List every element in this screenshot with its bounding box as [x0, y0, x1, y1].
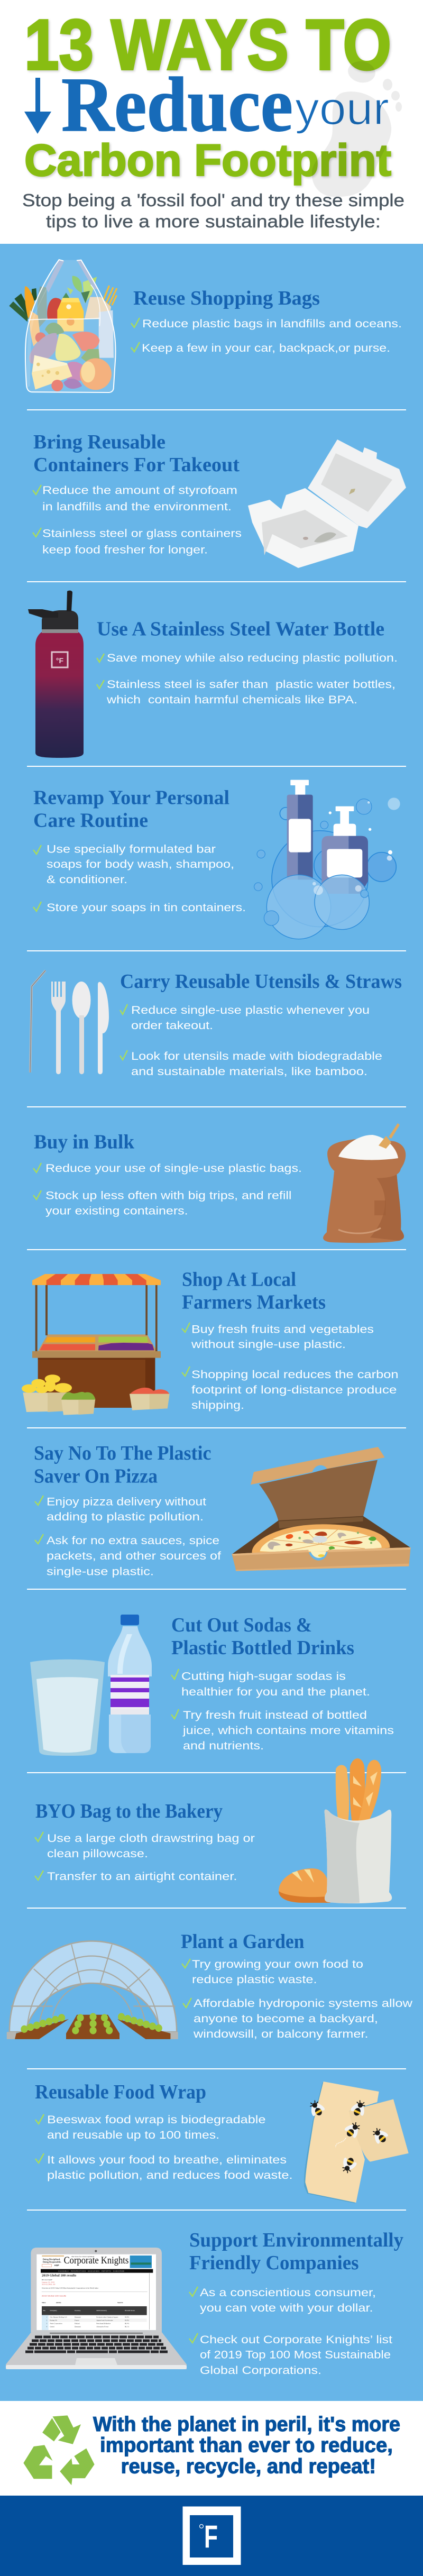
- heading: [171, 1614, 354, 1659]
- table rows: Denmark: [75, 2316, 81, 2318]
- panel: cut out sodas and plastic bottled drinks: [30, 1614, 394, 1756]
- table header text: Country: [75, 2309, 81, 2312]
- table rows: [47, 2316, 129, 2328]
- tip: bar soaps: [33, 842, 234, 886]
- tip: safer than plastic: [97, 678, 396, 706]
- closing message: [93, 2413, 400, 2478]
- tip: hydroponic systems: Affordable hydroponic systems allow: [194, 1997, 413, 2010]
- tip: styrofoam: [33, 484, 237, 513]
- tip: high-sugar sodas: Cutting high-sugar sodas is: [181, 1670, 346, 1683]
- tip: safer than plastic: Stainless steel is safer than plastic water bottles,: [107, 678, 396, 691]
- heading: Support Environmentally: [189, 2229, 403, 2251]
- tip: airtight container: Transfer to an airtight container.: [47, 1870, 237, 1883]
- tip: reduce single-use: Reduce single-use plastic whenever you: [131, 1004, 370, 1016]
- screen text: Corporate Knights: [64, 2255, 128, 2266]
- tip: fresh fruits: Buy fresh fruits and vegetables: [191, 1323, 374, 1335]
- tip: beeswax wrap: and reusable up to 100 times.: [47, 2129, 219, 2141]
- panel: reusable containers for takeout: [33, 431, 406, 568]
- title word: Reduce: Reduce: [61, 61, 293, 148]
- closing message: With the planet in peril, it's more: [93, 2413, 400, 2436]
- bottle logo: °F: [56, 656, 64, 665]
- panel: buy in bulk: [33, 1123, 406, 1243]
- panel: reusable food wrap: [35, 2081, 409, 2203]
- tip: food breathe: [35, 2153, 293, 2181]
- table rows: Products-other Chemical Agents: [96, 2316, 118, 2318]
- screen text: Show: [42, 2302, 46, 2304]
- heading: Buy in Bulk: [34, 1131, 135, 1153]
- panel: environmentally friendly companies: [6, 2229, 403, 2377]
- tip: big trips: [33, 1189, 292, 1217]
- tip: pizza delivery: adding to plastic pollution.: [47, 1510, 204, 1523]
- heading: [182, 1268, 326, 1314]
- panel: reuse shopping bags: [9, 260, 402, 392]
- table rows: Finland: [75, 2323, 80, 2325]
- tip: pizza delivery: Enjoy pizza delivery without: [47, 1496, 206, 1508]
- tip: stainless containers: Stainless steel or glass containers: [42, 527, 242, 539]
- tip: cloth bag: [35, 1832, 255, 1860]
- tip: styrofoam: Reduce the amount of styrofoam: [42, 484, 237, 497]
- tip: reduce single-use: [120, 1004, 370, 1032]
- heading: Shop At Local: [182, 1268, 296, 1290]
- table rows: Orsted: [50, 2326, 54, 2328]
- tip: Corporate Knights list: of 2019 Top 100 Most Sustainable: [200, 2348, 391, 2361]
- table rows: Kering SA: [50, 2319, 58, 2321]
- closing message: reuse, recycle, and repeat!: [121, 2455, 376, 2478]
- icon: plastic bag of groceries: [9, 260, 117, 392]
- tip: shopping local: Shopping local reduces the carbon: [191, 1368, 399, 1381]
- panel: stainless steel water bottle: [28, 591, 398, 758]
- icon: grey footprint watermark: [312, 59, 402, 197]
- table rows: 1: [47, 2316, 48, 2318]
- tip: vote with your dollar: you can vote with your dollar.: [200, 2302, 373, 2314]
- tip: fresh fruits: [182, 1323, 374, 1351]
- heading: Saver On Pizza: [34, 1465, 158, 1487]
- table rows: 2: [47, 2319, 48, 2321]
- table rows: France: [75, 2319, 79, 2321]
- tip: fresh fruit: juice, which contains more vitamins: [182, 1724, 394, 1737]
- icon: styrofoam takeout box: [248, 439, 406, 568]
- tip: save money: Save money while also reducing plastic pollution.: [107, 652, 398, 664]
- footer band: [0, 2496, 423, 2576]
- icon: open pizza box: [232, 1447, 411, 1571]
- screen text: AGF: [54, 2264, 59, 2267]
- tip: big trips: your existing containers.: [45, 1205, 188, 1217]
- logo: F mark: F: [204, 2519, 218, 2554]
- heading: Friendly Companies: [189, 2252, 358, 2274]
- tip: fresh fruit: [171, 1709, 394, 1752]
- screen text: Doing Disciplined.: [43, 2258, 60, 2260]
- title word: your: your: [295, 83, 389, 134]
- icon: straw and utensils: [30, 970, 109, 1074]
- tip: tin containers: Store your soaps in tin containers.: [47, 901, 246, 914]
- tip: no extras: Ask for no extra sauces, spice: [47, 1534, 219, 1547]
- tip: cloth bag: Use a large cloth drawstring bag or: [47, 1832, 255, 1845]
- tip: growing food: Try growing your own food to: [192, 1958, 363, 1970]
- icon: glass of water: [30, 1660, 105, 1756]
- tip: biodegradable utensils: and sustainable materials, like bamboo.: [131, 1065, 367, 1078]
- tip: high-sugar sodas: healthier for you and the planet.: [181, 1685, 370, 1698]
- subtitle: tips to live a more sustainable lifestyle:: [46, 212, 381, 231]
- subtitle: [22, 190, 404, 231]
- icon: water bottle: [28, 591, 84, 758]
- screen text: BY CK STAFF: [42, 2279, 52, 2281]
- heading: [189, 2229, 403, 2274]
- table rows: 4: [47, 2326, 48, 2328]
- tip: bar soaps: Use specially formulated bar: [47, 842, 216, 855]
- tip: high-sugar sodas: [171, 1669, 370, 1698]
- heading: Cut Out Sodas &: [171, 1614, 312, 1636]
- heading: Use A Stainless Steel Water Bottle: [97, 618, 384, 640]
- screen text: Search:: [117, 2302, 123, 2304]
- tip: keep a few: Keep a few in your car, backpack,or purse.: [142, 342, 390, 354]
- icon: plastic water bottle: [108, 1615, 152, 1753]
- screen text: 2019 Global 100 results: [42, 2274, 77, 2278]
- heading: Care Routine: [33, 810, 148, 832]
- icon: soap bottles and bubbles: [254, 780, 400, 939]
- tip: reduce plastic bags: Reduce plastic bags in landfills and oceans.: [142, 317, 402, 330]
- heading: Plastic Bottled Drinks: [171, 1637, 354, 1659]
- tip: hydroponic systems: anyone to become a backyard,: [194, 2012, 378, 2025]
- dividers: [27, 409, 406, 2211]
- tip: hydroponic systems: windowsill, or balcony farmer.: [193, 2028, 368, 2040]
- tip: fresh fruit: Try fresh fruit instead of bottled: [183, 1709, 367, 1721]
- screen text: entries: [56, 2302, 61, 2304]
- tip: big trips: Stock up less often with big trips, and refill: [45, 1189, 292, 1202]
- tip: safer than plastic: which contain harmful chemicals like BPA.: [106, 693, 357, 706]
- tip: food breathe: It allows your food to breathe, eliminates: [47, 2153, 287, 2166]
- heading: [34, 1442, 212, 1487]
- heading: Farmers Markets: [182, 1291, 326, 1314]
- table header text: No.: [43, 2309, 46, 2312]
- table rows: Chr. Hansen Holding A/S: [50, 2316, 67, 2318]
- heading: Say No To The Plastic: [34, 1442, 212, 1464]
- tip: beeswax wrap: [35, 2113, 265, 2141]
- heading: Reuse Shopping Bags: [133, 287, 320, 309]
- tip: styrofoam: in landfills and the environment.: [42, 500, 232, 513]
- screen text: Doing Responsible.: [43, 2260, 61, 2263]
- tip: shopping local: footprint of long-distance produce: [191, 1383, 397, 1396]
- screen text: January 22, 2019: [42, 2281, 54, 2284]
- screen text: Overview of 2019 Global 100 Most Sustainable Corporations in the World index: [42, 2287, 99, 2289]
- panel: local farmers markets: [22, 1268, 399, 1415]
- tip: growing food: reduce plastic waste.: [192, 1973, 317, 1986]
- panel: reusable utensils and straws: [30, 970, 402, 1078]
- tip: biodegradable utensils: [120, 1050, 382, 1078]
- tip: no extras: single-use plastic.: [47, 1565, 154, 1578]
- table rows: 80.1%: [125, 2326, 129, 2328]
- table rows: 83.8%: [125, 2319, 129, 2321]
- tip: food breathe: plastic pollution, and reduces food waste.: [47, 2169, 293, 2181]
- title: [24, 5, 391, 185]
- heading: Reusable Food Wrap: [35, 2081, 206, 2103]
- tip: Corporate Knights list: [189, 2333, 392, 2377]
- table rows: 80.4%: [125, 2323, 129, 2325]
- screen text: 2019 Global 100 results: [42, 2295, 66, 2297]
- tip: shopping local: shipping.: [191, 1399, 244, 1411]
- tip: no extras: [35, 1534, 221, 1578]
- tip: vote with your dollar: As a conscientious consumer,: [200, 2286, 376, 2299]
- table header text: Overall Score: [125, 2309, 135, 2312]
- tip: pizza delivery: [35, 1496, 206, 1523]
- subtitle: Stop being a 'fossil fool' and try these simple: [22, 190, 404, 210]
- tip: reduce single-use: order takeout.: [131, 1019, 213, 1032]
- title line: Carbon Footprint: Carbon Footprint: [24, 135, 391, 185]
- heading: BYO Bag to the Bakery: [35, 1800, 223, 1822]
- panel: BYO bag to the bakery: [35, 1758, 392, 1903]
- heading: Plant a Garden: [181, 1930, 305, 1952]
- table header text: Company: [50, 2309, 57, 2312]
- tip: no extras: packets, and other sources of: [47, 1550, 221, 1562]
- closing message: important than ever to reduce,: [100, 2434, 393, 2456]
- screen text: 2019 GLOBAL 100: [42, 2284, 56, 2286]
- icon: market stall: [22, 1274, 170, 1415]
- table header text: [43, 2309, 135, 2312]
- screen text: The Voice for Clean Capitalism: [71, 2256, 95, 2258]
- panel: plant a garden: [7, 1930, 413, 2040]
- icon: beeswax wraps with bees: [304, 2082, 409, 2203]
- tip: bar soaps: soaps for body wash, shampoo,: [47, 858, 234, 870]
- panel: plastic saver on pizza: [34, 1442, 411, 1578]
- tip: fresh fruits: without single-use plastic.: [191, 1338, 346, 1351]
- heading: [33, 431, 240, 476]
- icon: greenhouse with vegetable beds: [7, 1941, 178, 2039]
- tip: Corporate Knights list: Check out Corporate Knights’ list: [200, 2333, 392, 2346]
- table header text: GICS Industry: [96, 2309, 107, 2312]
- table rows: 94.8%: [125, 2316, 129, 2318]
- table rows: Denmark: [75, 2326, 81, 2328]
- icon: sack of flour with scoop: [323, 1123, 406, 1243]
- heading: Containers For Takeout: [33, 454, 240, 476]
- tip: beeswax wrap: Beeswax food wrap is biodegradable: [47, 2113, 265, 2126]
- tip: growing food: [182, 1958, 363, 1986]
- tip: fresh fruit: and nutrients.: [183, 1739, 264, 1752]
- icon: bread in a cloth bag: [279, 1758, 392, 1903]
- logo: F mark: [183, 2507, 241, 2565]
- heading: [33, 787, 229, 832]
- tip: stainless containers: [33, 527, 242, 556]
- icon: laptop showing Corporate Knights page: [6, 2248, 187, 2369]
- tip: shopping local: [182, 1367, 399, 1411]
- tip: biodegradable utensils: Look for utensils made with biodegradable: [131, 1050, 382, 1062]
- tip: hydroponic systems: [183, 1997, 413, 2040]
- table rows: Alternative Power: [96, 2326, 109, 2328]
- tip: cloth bag: clean pillowcase.: [47, 1847, 148, 1860]
- heading: Bring Reusable: [33, 431, 165, 453]
- heading: Revamp Your Personal: [33, 787, 229, 809]
- tip: Corporate Knights list: Global Corporations.: [200, 2364, 321, 2377]
- screen text: [42, 2255, 128, 2304]
- heading: Carry Reusable Utensils & Straws: [120, 970, 402, 993]
- tip: plastic bags: Reduce your use of single-use plastic bags.: [45, 1162, 302, 1175]
- table rows: 3: [47, 2323, 48, 2325]
- nav bar text: CHANNELS PERSPECTIVES MAGAZINES REPORTS SUBSCRIBE: [58, 2270, 124, 2272]
- table rows: Apparel and Accessories: [96, 2319, 113, 2321]
- icon: recycle symbol: [23, 2415, 95, 2485]
- icon: down arrow: [24, 78, 51, 134]
- tip: vote with your dollar: [189, 2286, 376, 2314]
- tip: bar soaps: & conditioner.: [47, 873, 127, 886]
- tip: stainless containers: keep food fresher for longer.: [42, 544, 208, 556]
- table rows: Neste Corporation: [50, 2323, 62, 2325]
- table rows: Petroleum Refineries: [96, 2323, 111, 2325]
- panel: personal care routine: [33, 780, 400, 939]
